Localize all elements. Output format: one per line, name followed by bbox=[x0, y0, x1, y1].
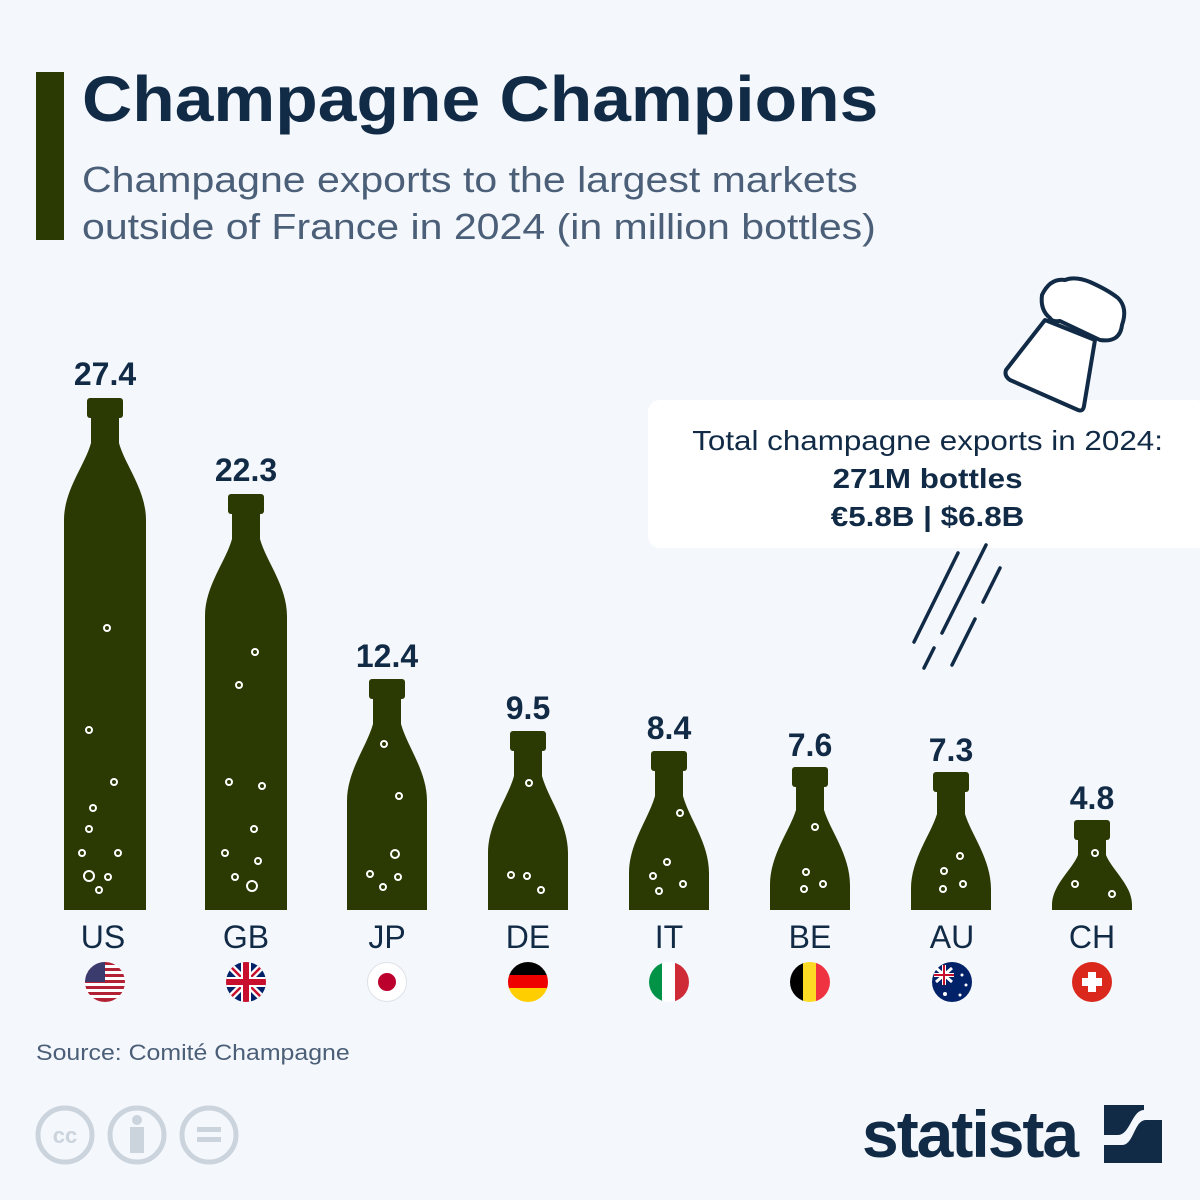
value labels: 4.8 bbox=[1070, 780, 1114, 816]
subtitle: outside of France in 2024 (in million bottles) bbox=[82, 206, 876, 247]
country labels: CH bbox=[1069, 919, 1115, 955]
icons: license bbox=[36, 1106, 238, 1164]
callout: total exports: €5.8B | $6.8B bbox=[831, 501, 1024, 532]
country labels: JP bbox=[368, 919, 406, 955]
subtitle bbox=[82, 159, 876, 247]
title accent bar bbox=[36, 72, 64, 240]
callout: total exports: Total champagne exports in 2024: bbox=[692, 425, 1163, 456]
flag: BE bbox=[790, 962, 830, 1002]
country labels: AU bbox=[930, 919, 974, 955]
value labels: 7.3 bbox=[929, 732, 973, 768]
chart bbox=[64, 276, 1132, 1002]
icons: license: cc bbox=[53, 1123, 77, 1148]
bar: IT bbox=[629, 751, 709, 910]
value labels: 27.4 bbox=[74, 356, 136, 392]
bar: GB bbox=[205, 494, 287, 910]
bar: JP bbox=[347, 679, 427, 910]
callout: total exports: 271M bottles bbox=[833, 463, 1023, 494]
callout: total exports bbox=[648, 400, 1200, 548]
value labels: 8.4 bbox=[647, 710, 691, 746]
value labels: 22.3 bbox=[215, 452, 277, 488]
flag: IT bbox=[649, 962, 689, 1002]
logo: statista: statista bbox=[862, 1097, 1077, 1171]
country labels: IT bbox=[655, 919, 683, 955]
bar: US bbox=[64, 398, 146, 910]
bar: DE bbox=[488, 731, 568, 910]
subtitle: Champagne exports to the largest markets bbox=[82, 159, 858, 200]
flag: JP bbox=[368, 962, 406, 1002]
title: Champagne Champions bbox=[82, 63, 878, 135]
country labels: US bbox=[81, 919, 125, 955]
value labels: 12.4 bbox=[356, 638, 418, 674]
flag: GB bbox=[226, 962, 266, 1002]
flag: CH bbox=[1072, 962, 1112, 1002]
bubbles bbox=[79, 625, 1115, 897]
flag: AU bbox=[932, 962, 972, 1002]
value labels: 7.6 bbox=[788, 727, 832, 763]
bar: BE bbox=[770, 767, 850, 910]
country labels: DE bbox=[506, 919, 550, 955]
source: Source: Comité Champagne bbox=[36, 1040, 350, 1065]
country labels: BE bbox=[789, 919, 831, 955]
value labels: 9.5 bbox=[506, 690, 550, 726]
bar: CH bbox=[1052, 820, 1132, 910]
country labels: GB bbox=[223, 919, 269, 955]
country labels bbox=[81, 919, 1115, 955]
icon: cork bbox=[1006, 278, 1124, 410]
flag: US bbox=[85, 962, 125, 1002]
value labels bbox=[74, 356, 1114, 816]
icon: motion lines bbox=[914, 545, 1000, 668]
flag: DE bbox=[508, 962, 548, 1002]
bar: AU bbox=[911, 772, 991, 910]
